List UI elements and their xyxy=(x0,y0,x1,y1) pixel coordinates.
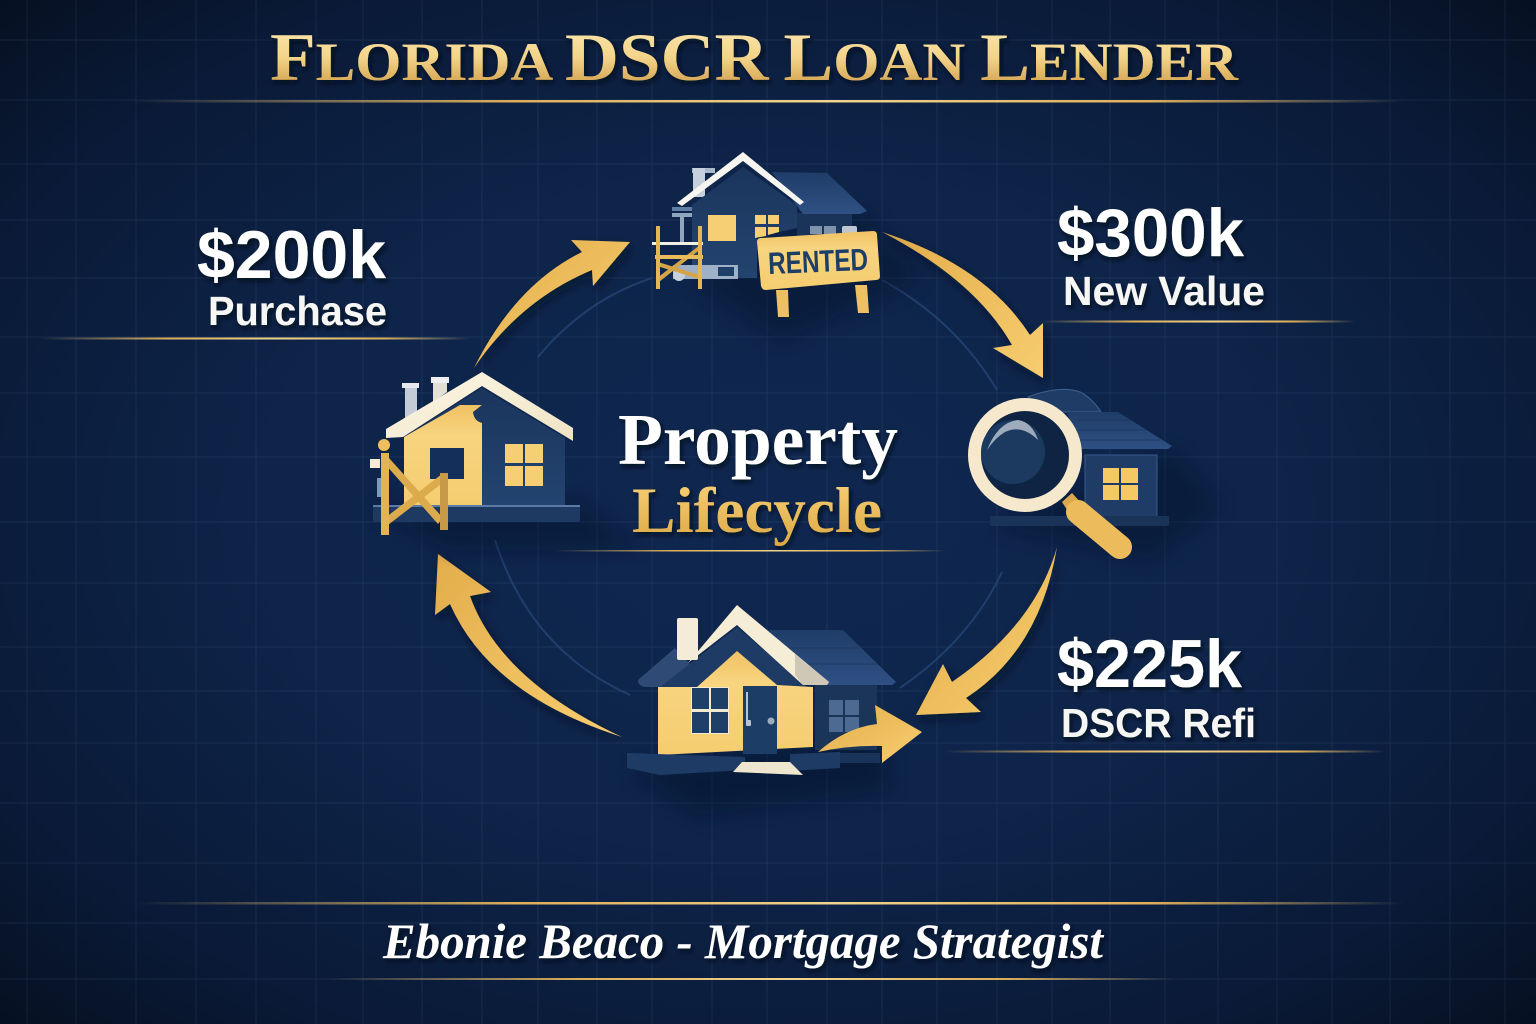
lens xyxy=(968,398,1082,512)
windows xyxy=(708,215,779,241)
centre heading: Lifecycle xyxy=(632,475,882,547)
base xyxy=(990,516,1169,526)
step xyxy=(733,762,803,775)
main wall xyxy=(692,167,797,278)
icon: rented house xyxy=(652,152,920,340)
navy wall xyxy=(404,388,565,506)
footer credit: Ebonie Beaco - Mortgage Strategist xyxy=(382,913,1105,969)
arrow: refi to purchase xyxy=(435,554,622,737)
arrow: new value to refi xyxy=(916,547,1057,715)
label: purchase: Purchase xyxy=(208,288,387,334)
centre heading: Property xyxy=(618,399,898,480)
yellow wall xyxy=(404,405,482,506)
title: FLORIDA DSCR LOAN LENDER xyxy=(270,19,1239,95)
label: new value: New Value xyxy=(1063,268,1265,314)
chimney xyxy=(692,168,715,197)
refi line xyxy=(945,750,1385,752)
gable xyxy=(660,627,807,687)
scaffold xyxy=(370,439,448,535)
mini arrow xyxy=(818,705,922,763)
white roof xyxy=(677,152,804,206)
label: purchase: $200k xyxy=(197,217,386,293)
left awning xyxy=(672,207,692,245)
ground equipment xyxy=(673,265,738,281)
purchase line xyxy=(40,338,470,340)
rented sign xyxy=(757,231,880,290)
cream roof xyxy=(688,605,829,685)
chimneys xyxy=(402,377,449,420)
arrow: purchase to rented xyxy=(474,240,630,368)
label: new value xyxy=(1057,195,1265,314)
title divider xyxy=(130,100,1405,102)
rented sign: RENTED xyxy=(767,242,869,281)
chimney xyxy=(677,618,698,660)
handle xyxy=(1062,493,1120,547)
right window xyxy=(505,444,543,486)
icon: appraisal house with magnifier xyxy=(968,389,1220,560)
dome xyxy=(1028,389,1101,412)
label: purchase xyxy=(197,217,387,334)
cycle ring xyxy=(495,278,1002,695)
arrow: rented to new value xyxy=(882,232,1043,378)
scaffold xyxy=(652,226,703,289)
centre heading xyxy=(618,399,898,547)
label: dscr refi: $225k xyxy=(1057,626,1242,702)
new value line xyxy=(1040,320,1355,322)
side wing xyxy=(772,172,867,240)
base xyxy=(627,752,880,775)
icon: refinanced house xyxy=(627,605,922,815)
window xyxy=(1103,468,1138,500)
icon: house under renovation xyxy=(370,372,640,550)
white roof xyxy=(386,372,573,441)
base xyxy=(373,505,580,522)
label: new value: $300k xyxy=(1057,195,1244,271)
centre divider xyxy=(555,550,945,552)
left roof xyxy=(638,640,750,687)
label: dscr refi xyxy=(1057,626,1256,746)
yellow wall xyxy=(658,651,813,755)
label: dscr refi: DSCR Refi xyxy=(1061,700,1256,746)
sign posts xyxy=(776,285,869,317)
right wing xyxy=(768,630,896,750)
footer bottom line xyxy=(325,978,1175,980)
wall xyxy=(1085,455,1157,517)
window xyxy=(691,687,729,734)
footer top line xyxy=(135,902,1405,904)
door xyxy=(743,686,777,754)
door opening xyxy=(430,448,464,479)
roof xyxy=(1067,412,1172,449)
